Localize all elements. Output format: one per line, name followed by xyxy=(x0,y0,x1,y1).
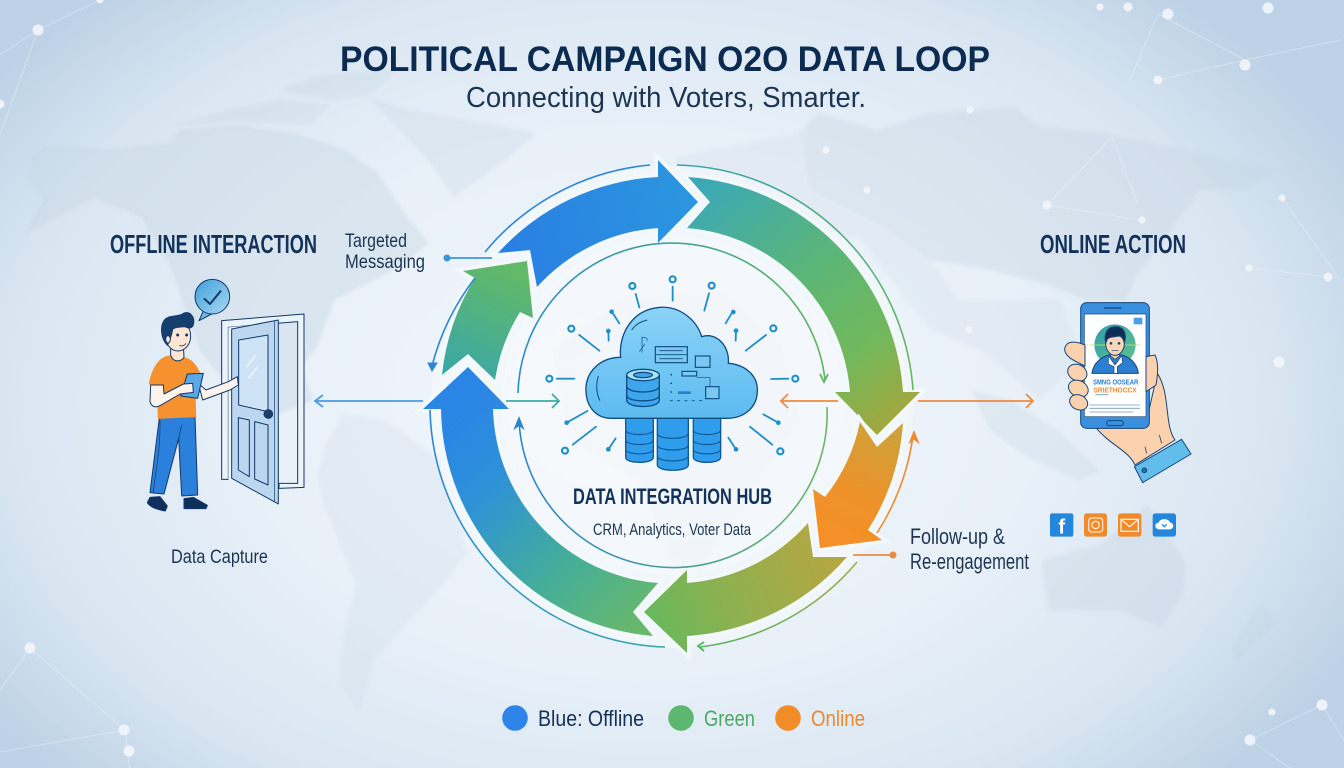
arrow: orange lower right xyxy=(813,422,903,548)
arrow: blue top xyxy=(498,160,698,287)
rays xyxy=(546,276,798,454)
legend: orange xyxy=(775,705,865,731)
loop arrows xyxy=(423,160,920,653)
label: targeted messaging: Messaging xyxy=(345,251,425,273)
arc: outer bottom left blue xyxy=(430,410,665,647)
label: targeted messaging xyxy=(345,230,425,273)
title: POLITICAL CAMPAIGN O2O DATA LOOP xyxy=(340,39,990,79)
arrow: teal green right xyxy=(687,177,920,435)
arc: inner bottom xyxy=(519,407,827,568)
label: follow-up: Follow-up & xyxy=(910,524,1005,549)
loop backing ring xyxy=(467,202,877,612)
icon: instagram xyxy=(1084,513,1107,537)
world map backdrop xyxy=(26,70,1276,712)
icon: mail xyxy=(1118,513,1141,537)
database stacks xyxy=(626,417,721,470)
cloud server and nodes xyxy=(639,337,719,401)
icon: cloud chat xyxy=(1153,513,1176,537)
arc arrowheads xyxy=(428,363,918,651)
legend: green: Green xyxy=(704,706,755,731)
phone: SRIETHOCCX xyxy=(1093,385,1137,394)
phone text: SMNG OOSEAR xyxy=(1093,377,1139,386)
arrow: olive green bottom xyxy=(644,523,847,653)
arc: outer left blue xyxy=(432,278,475,366)
legend: blue: Blue: Offline xyxy=(538,706,644,731)
phone xyxy=(1081,303,1149,428)
sleeve xyxy=(1134,439,1191,483)
legend: green xyxy=(668,705,755,731)
icon: cloud hub xyxy=(546,276,798,470)
connector: loop to hub orange arrow xyxy=(780,394,838,408)
fingers xyxy=(1065,342,1158,413)
label: follow-up: Re-engagement xyxy=(910,549,1029,574)
arc: outer bottom green xyxy=(700,562,857,647)
label: follow-up xyxy=(910,524,1029,574)
heading: online action: ONLINE ACTION xyxy=(1040,229,1186,259)
icon: canvasser at door xyxy=(147,279,304,511)
door frame xyxy=(222,314,304,497)
door xyxy=(232,320,278,504)
arrow: blue to green large left xyxy=(423,367,658,636)
speech bubble with check xyxy=(195,279,230,321)
hand palm xyxy=(1095,373,1175,465)
legend: blue xyxy=(502,705,644,731)
arc: outer right orange xyxy=(877,436,913,533)
cloud database xyxy=(627,369,659,406)
hub backing disc xyxy=(502,236,842,576)
legend xyxy=(502,705,865,731)
icon: facebook: f xyxy=(1058,515,1065,538)
label: data capture: Data Capture xyxy=(171,547,268,568)
connector: follow-up xyxy=(853,552,896,558)
connector: online orange arrow xyxy=(918,394,1033,408)
social icons xyxy=(1050,513,1176,538)
legend: orange: Online xyxy=(811,706,865,731)
outer thin arcs xyxy=(430,165,913,647)
connector: offline to loop arrow xyxy=(315,395,423,407)
heading: offline interaction: OFFLINE INTERACTION xyxy=(110,229,317,259)
connector: targeted messaging xyxy=(444,255,492,261)
profile picture xyxy=(1094,324,1136,366)
person xyxy=(147,313,238,511)
arc: outer top right green xyxy=(677,165,913,390)
icon: hand holding phone xyxy=(1065,303,1191,483)
hub heading: DATA INTEGRATION HUB xyxy=(573,484,772,509)
label: targeted messaging: Targeted xyxy=(345,230,407,252)
subtitle: Connecting with Voters, Smarter. xyxy=(466,82,866,114)
connector: loop to hub arrow xyxy=(506,394,559,408)
arrow: green small left xyxy=(442,261,533,380)
hub caption: CRM, Analytics, Voter Data xyxy=(593,520,751,539)
cloud shape xyxy=(586,307,757,418)
arc: outer top left blue xyxy=(485,165,650,252)
arc: inner top xyxy=(518,243,825,393)
